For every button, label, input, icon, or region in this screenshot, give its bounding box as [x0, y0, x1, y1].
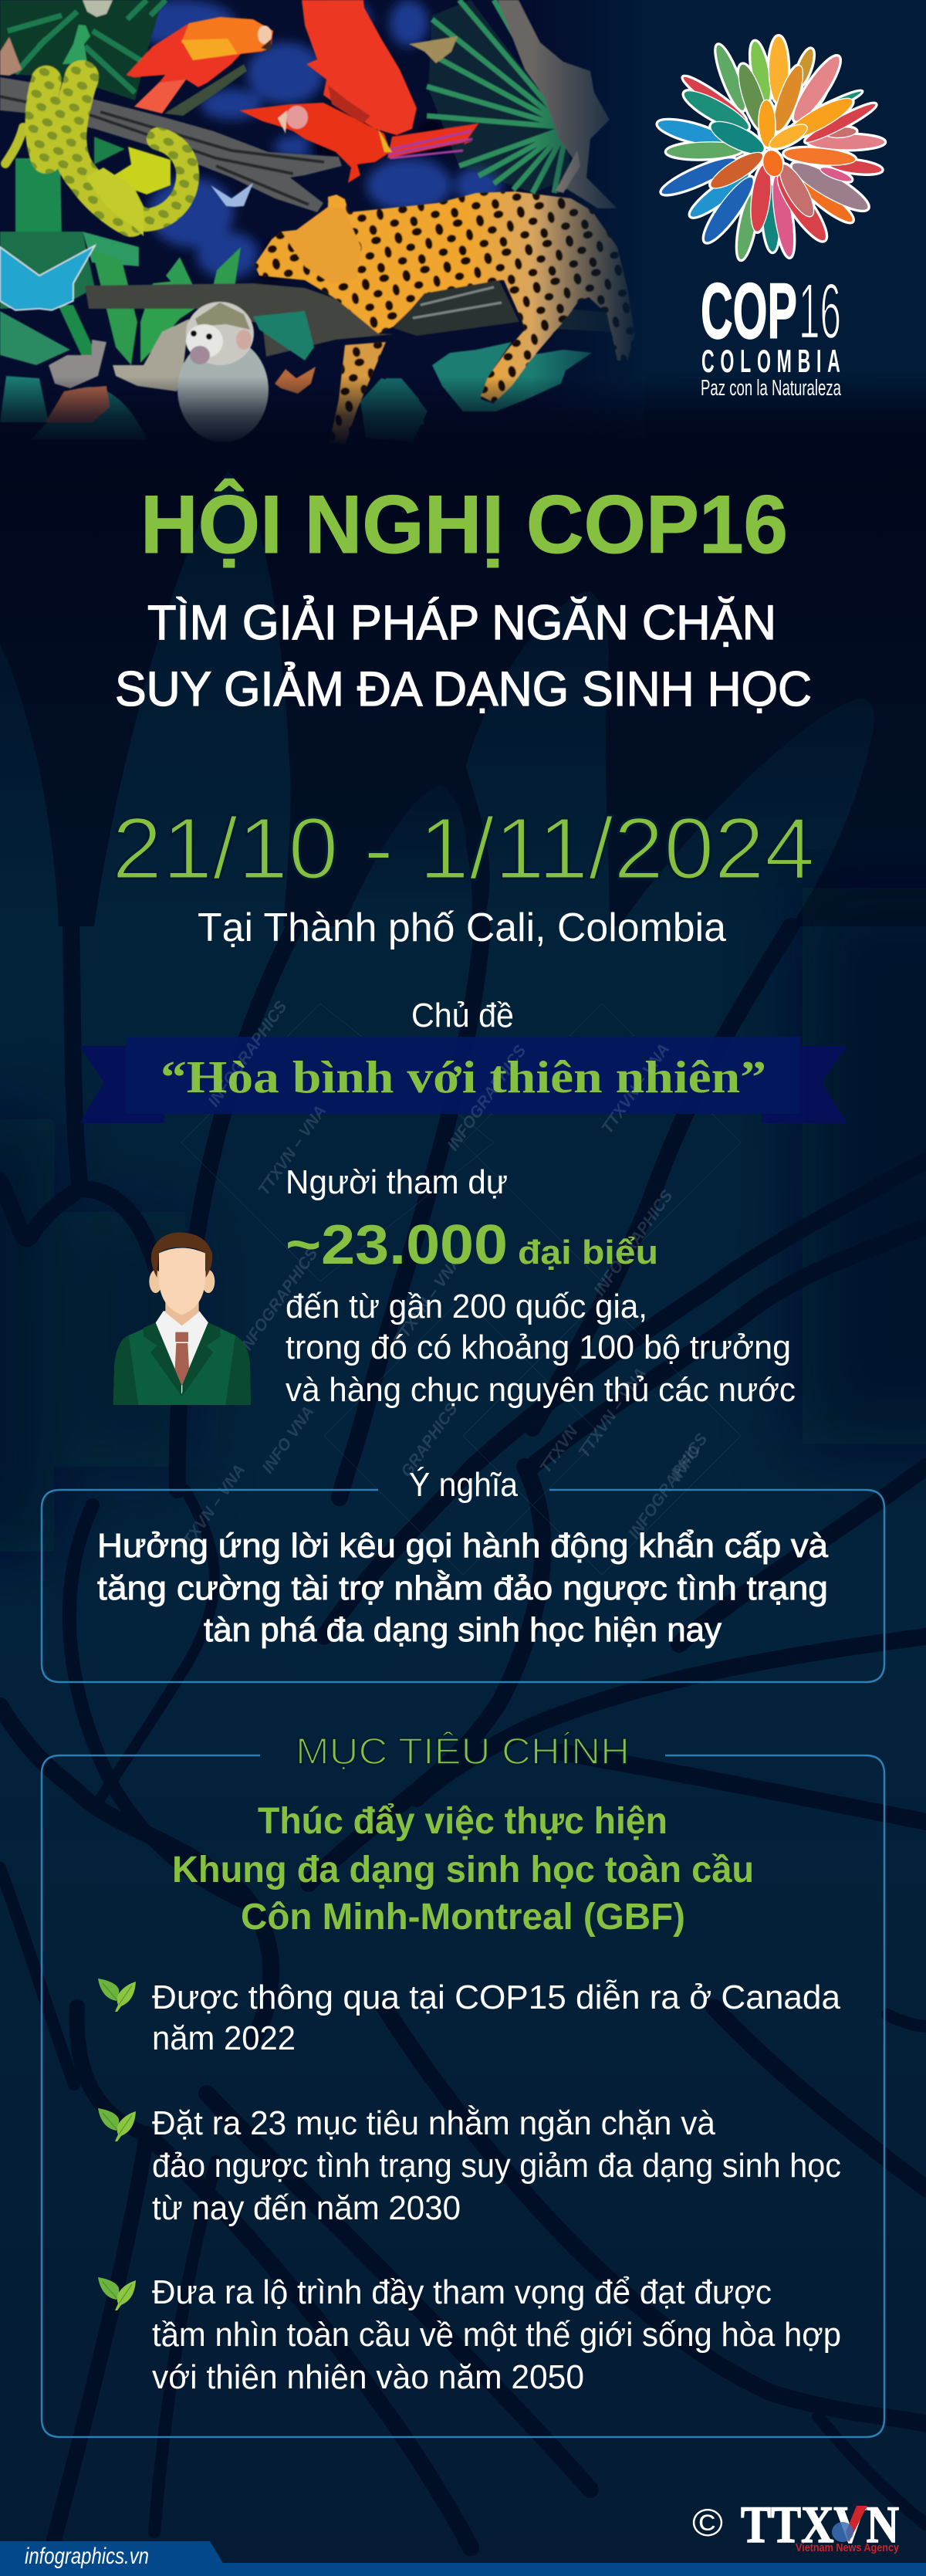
watermarks: INFOGRAPHICS	[625, 1430, 711, 1542]
watermarks: INFOGRAPHICS	[444, 1042, 529, 1154]
logo: TTXVN: ©	[692, 2501, 723, 2544]
snake	[5, 77, 188, 220]
illustration: rainforest animals	[0, 0, 644, 463]
GBF heading: Côn Minh-Montreal (GBF)	[241, 1897, 685, 1938]
teal leaves	[432, 342, 592, 411]
watermarks: GRAPHICS	[397, 1400, 461, 1481]
logo: TTXVN	[692, 2495, 900, 2554]
watermarks: TTXVN – VNA	[390, 1253, 465, 1349]
bullet 3	[152, 2273, 841, 2396]
perch branch	[164, 64, 247, 116]
bullet 3: Đưa ra lộ trình đầy tham vọng để đạt được	[152, 2273, 772, 2311]
leopard	[255, 191, 635, 445]
lower branch	[85, 283, 394, 357]
GBF heading	[172, 1801, 754, 1938]
watermarks: INFOGRAPHICS	[590, 1187, 676, 1299]
gibbon	[498, 0, 617, 208]
logo: COP16 wordmark: COP	[701, 267, 797, 355]
theme text: “Hòa bình với thiên nhiên”	[161, 1051, 766, 1102]
bullet 2: đảo ngược tình trạng suy giảm đa dạng sinh học	[152, 2147, 841, 2185]
delegates number: đại biểu	[518, 1234, 658, 1271]
logo: COP16 flower	[655, 36, 885, 261]
participants block	[286, 1163, 796, 1409]
theme ribbon	[79, 1037, 847, 1123]
panel: significance: Hưởng ứng lời kêu gọi hành động khẩn cấp và	[97, 1527, 829, 1565]
watermarks: TTXVN	[536, 1423, 582, 1477]
logo: TTXVN: TTXVN	[741, 2495, 899, 2554]
participants block: Người tham dự	[286, 1163, 508, 1201]
watermarks: INFO VNA	[259, 1403, 318, 1477]
participants block: đến từ gần 200 quốc gia,	[286, 1288, 647, 1325]
icon: leaf 1	[98, 1979, 136, 2012]
left reed	[15, 158, 62, 232]
bullet 1	[152, 1979, 841, 2057]
text: 16	[799, 267, 841, 355]
icon: leaf 2	[98, 2108, 136, 2141]
panel: significance: Ý nghĩa	[409, 1466, 518, 1504]
logo: COP16 wordmark: Paz con la Naturaleza	[701, 376, 842, 401]
bullet 3: với thiên nhiên vào năm 2050	[152, 2358, 584, 2396]
logo: COP16 wordmark: COLOMBIA	[701, 344, 840, 380]
watermarks: INFOGRAPHICS	[204, 998, 290, 1110]
date: 21/10 - 1/11/2024	[112, 800, 815, 897]
bullet 3: tầm nhìn toàn cầu về một thế giới sống hòa hợp	[152, 2316, 841, 2354]
bullet 2: từ nay đến năm 2030	[152, 2189, 461, 2227]
watermarks: INFO	[667, 1443, 705, 1484]
lower left foliage	[0, 232, 95, 309]
upper branch	[0, 77, 342, 212]
top left foliage	[0, 0, 162, 100]
delegates number: ~23.000	[286, 1214, 508, 1276]
delegates number	[286, 1214, 658, 1276]
main goals heading: MỤC TIÊU CHÍNH	[296, 1731, 630, 1772]
subtitle: SUY GIẢM ĐA DẠNG SINH HỌC	[115, 662, 812, 716]
monkey	[49, 302, 269, 442]
location: Tại Thành phố Cali, Colombia	[198, 905, 726, 950]
subtitle	[115, 595, 812, 716]
subtitle: TÌM GIẢI PHÁP NGĂN CHẶN	[147, 595, 776, 650]
bullet 1: năm 2022	[152, 2019, 296, 2057]
watermarks	[174, 998, 711, 1558]
participants block: trong đó có khoảng 100 bộ trưởng	[286, 1329, 791, 1366]
logo: COP16 wordmark	[701, 267, 842, 401]
bullet 1: Được thông qua tại COP15 diễn ra ở Canada	[152, 1979, 841, 2016]
palm frond	[428, 0, 571, 193]
watermarks: TTXVN – VNA	[174, 1461, 248, 1558]
right photo fade	[644, 377, 926, 463]
logo: TTXVN: Vietnam News Agency	[796, 2541, 900, 2554]
icon: delegate	[113, 1233, 251, 1405]
icon: leaf 3	[98, 2277, 136, 2310]
watermarks: TTXVN – VNA	[255, 1102, 330, 1199]
footer bar	[0, 2541, 926, 2576]
website: infographics.vn	[25, 2544, 149, 2569]
panel: significance: tăng cường tài trợ nhằm đảo ngược tình trạng	[97, 1569, 828, 1607]
participants block: và hàng chục nguyên thủ các nước	[286, 1371, 796, 1409]
frog	[46, 386, 110, 422]
GBF heading: Thúc đẩy việc thực hiện	[258, 1801, 667, 1842]
watermarks: INFOGRAPHICS	[235, 1245, 321, 1357]
bullet 2	[152, 2104, 841, 2227]
panel: main goals	[42, 1731, 884, 2437]
GBF heading: Khung đa dạng sinh học toàn cầu	[172, 1850, 754, 1891]
watermarks: TTXVN – VNA	[598, 1041, 673, 1137]
parrot 2	[239, 0, 478, 183]
bullet 2: Đặt ra 23 mục tiêu nhằm ngăn chặn và	[152, 2104, 716, 2142]
panel: significance	[42, 1466, 884, 1682]
panel: significance: tàn phá đa dạng sinh học hiện nay	[204, 1611, 722, 1649]
butterflies	[409, 36, 458, 63]
parrot 1	[127, 17, 273, 113]
title: HỘI NGHỊ COP16	[140, 478, 788, 570]
watermarks: TTXVN – VNA	[575, 1365, 650, 1461]
theme label: Chủ đề	[411, 997, 514, 1034]
